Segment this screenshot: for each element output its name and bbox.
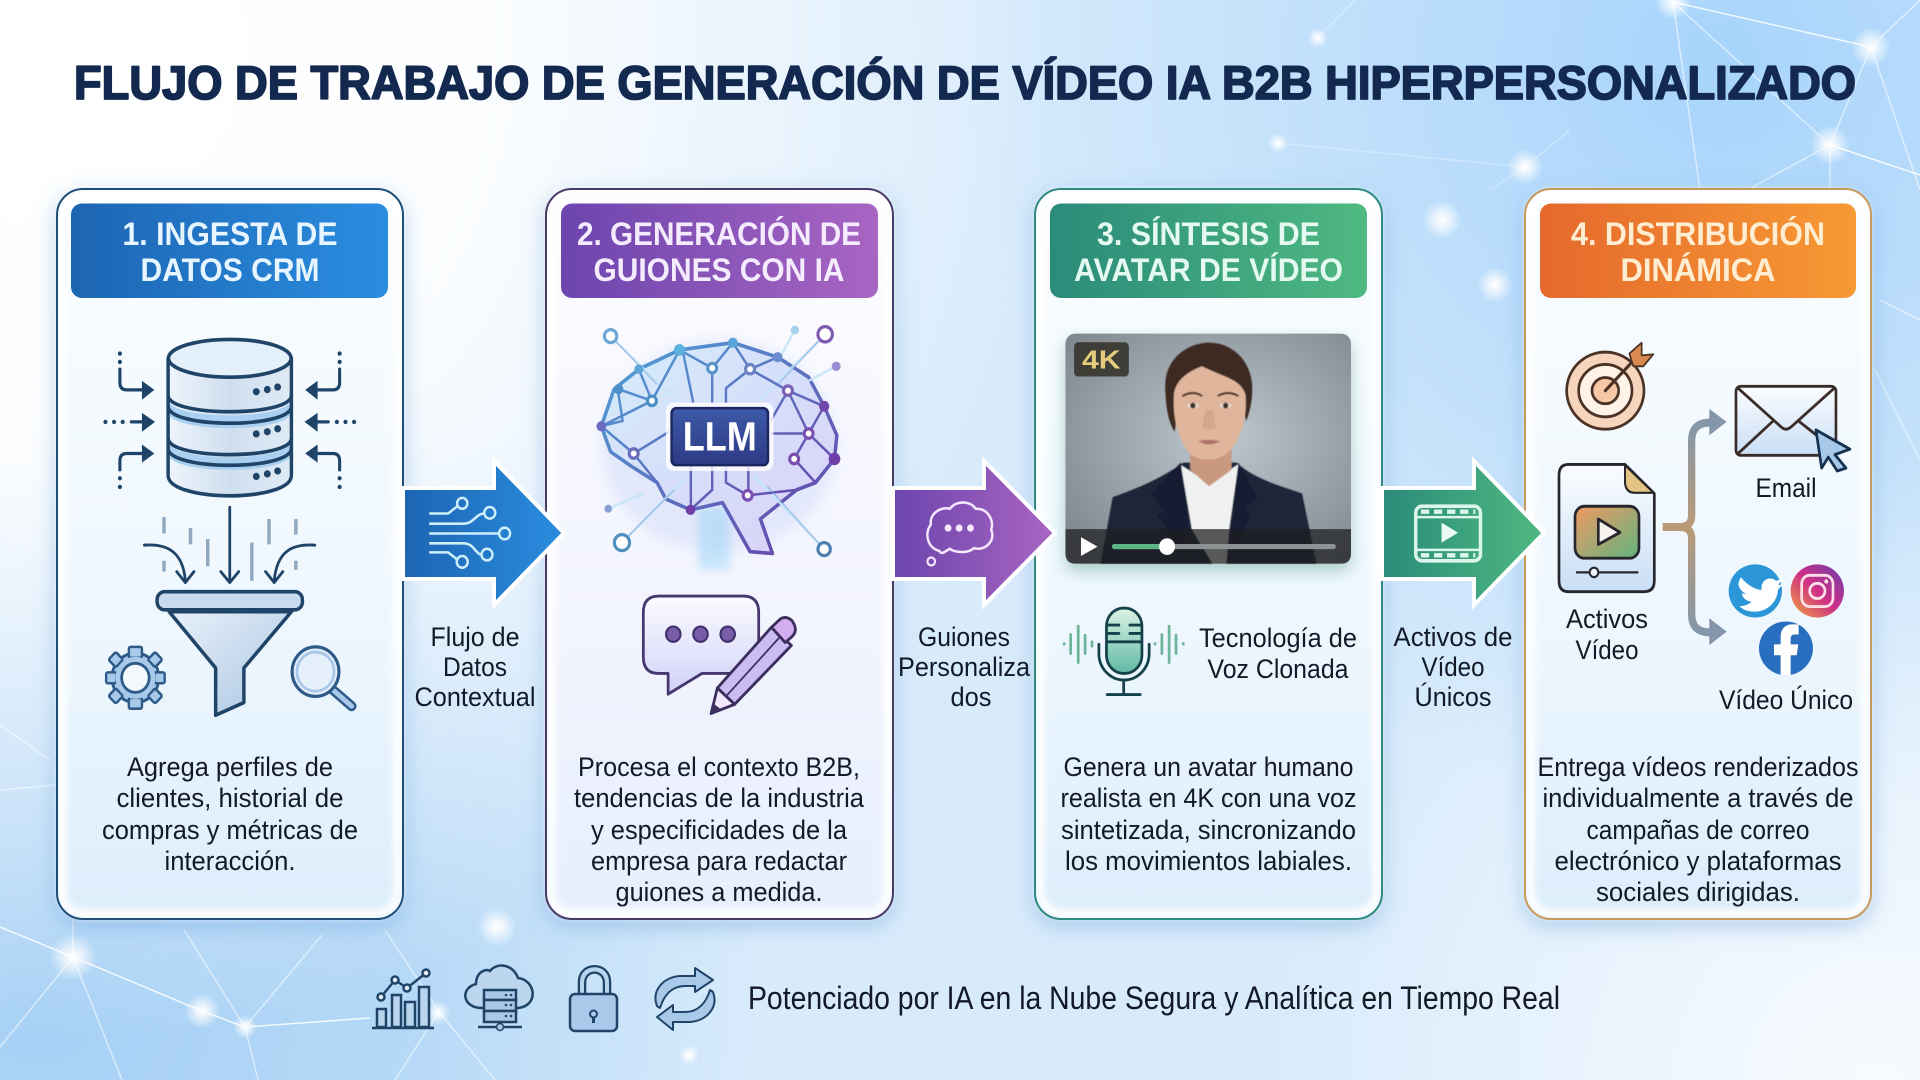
description: step 1 [102,752,358,876]
description: step 2: tendencias de la industria [574,783,865,813]
arrow: activos de vídeo [1382,461,1544,605]
header: step 3 [1050,204,1367,298]
icon: sync arrows [656,968,714,1030]
arrow: guiones [893,461,1055,605]
icon: video file [1559,464,1654,592]
arrow: flujo de datos [403,461,564,605]
description: step 4: Entrega vídeos renderizados [1538,752,1858,782]
icon: neural brain with LLM chip: LLM [683,415,757,460]
badge: 4K: 4K [1082,346,1121,375]
header: step 2: GUIONES CON IA [594,252,844,288]
label: guiones personalizados: Guiones [918,622,1010,652]
label: guiones personalizados: dos [950,682,992,712]
description: step 2 [574,752,865,907]
description: step 4: campañas de correo [1586,815,1810,845]
label: activos de vídeo únicos [1394,622,1512,712]
header: step 1 [71,204,388,298]
header: step 4: DINÁMICA [1620,251,1776,288]
icon: chat bubble and pencil [643,596,795,713]
icon: target with arrow [1567,343,1653,429]
icon: funnel with gear and magnifier [106,507,352,715]
icon: thought bubble [927,503,992,565]
description: step 4: electrónico y plataformas [1554,846,1842,876]
description: step 1: clientes, historial de [116,783,344,813]
label: flujo de datos contextual [414,622,536,712]
label: flujo de datos contextual: Flujo de [430,622,520,652]
label: cloned voice technology: Voz Clonada [1208,654,1349,684]
icon: neural brain with LLM chip [596,326,841,570]
header: step 2 [561,204,878,298]
icon: microphone with sound waves [1064,608,1183,695]
footer [372,966,1560,1031]
description: step 1: compras y métricas de [102,815,358,845]
panel: 4. distribución dinámica [1525,189,1871,919]
label: cloned voice technology: Tecnología de [1199,623,1357,653]
icon: email with cursor [1736,386,1850,471]
panel: 3. síntesis de avatar de vídeo [1035,189,1382,919]
description: step 2: guiones a medida. [616,877,822,907]
icon: facebook [1759,621,1813,675]
icon: twitter [1729,564,1783,617]
label: flujo de datos contextual: Contextual [414,682,536,712]
icon: bar chart [372,970,434,1028]
description: step 3: sintetizada, sincronizando [1061,815,1356,845]
description: step 1: interacción. [164,846,296,876]
header: step 1: 1. INGESTA DE [122,216,338,252]
header: step 3: 3. SÍNTESIS DE [1097,215,1320,252]
icon: cloud server [465,966,533,1030]
panel: 1. ingesta de datos CRM [57,189,403,919]
label: vídeo único: Vídeo Único [1719,684,1853,715]
icon: instagram [1791,564,1844,617]
header: step 4: 4. DISTRIBUCIÓN [1571,215,1825,252]
video player with avatar [1065,334,1351,564]
description: step 2: Procesa el contexto B2B, [578,752,860,782]
label: cloned voice technology [1199,623,1357,684]
label: guiones personalizados [898,622,1031,712]
panel: 2. generación de guiones con IA [546,189,893,919]
description: step 2: empresa para redactar [591,846,847,876]
description: step 3: los movimientos labiales. [1065,846,1352,876]
icon: circuit [429,498,510,568]
label: activos de vídeo únicos: Vídeo [1422,652,1484,682]
label: flujo de datos contextual: Datos [443,652,507,682]
icon: padlock [570,966,617,1031]
label: activos vídeo: Activos [1566,604,1648,634]
icon: film strip with play [1416,506,1480,561]
description: step 3: realista en 4K con una voz [1060,783,1356,813]
header: step 3: AVATAR DE VÍDEO [1074,251,1343,288]
description: step 1: Agrega perfiles de [127,752,333,782]
description: step 4: sociales dirigidas. [1596,877,1800,907]
header: step 4 [1540,204,1856,298]
description: step 4: individualmente a través de [1542,783,1854,813]
description: step 4 [1538,752,1858,907]
title: FLUJO DE TRABAJO DE GENERACIÓN DE VÍDEO IA B2B HIPERPERSONALIZADO [74,56,1856,109]
label: activos de vídeo únicos: Únicos [1414,681,1492,712]
label: activos de vídeo únicos: Activos de [1394,622,1512,652]
badge: 4K [1074,342,1129,376]
label: guiones personalizados: Personaliza [898,652,1031,682]
arrows: branching to channels [1663,409,1727,645]
icon: database with incoming arrows [103,339,356,496]
header: step 2: 2. GENERACIÓN DE [577,215,861,252]
description: step 3 [1060,752,1356,876]
description: step 2: y especificidades de la [591,815,848,845]
header: step 1: DATOS CRM [140,252,320,288]
label: activos vídeo: Vídeo [1576,635,1638,665]
label: email: Email [1756,473,1816,503]
footer text: Potenciado por IA en la Nube Segura y Analítica en Tiempo Real [748,980,1560,1016]
description: step 3: Genera un avatar humano [1064,752,1354,782]
label: activos vídeo [1566,604,1648,665]
